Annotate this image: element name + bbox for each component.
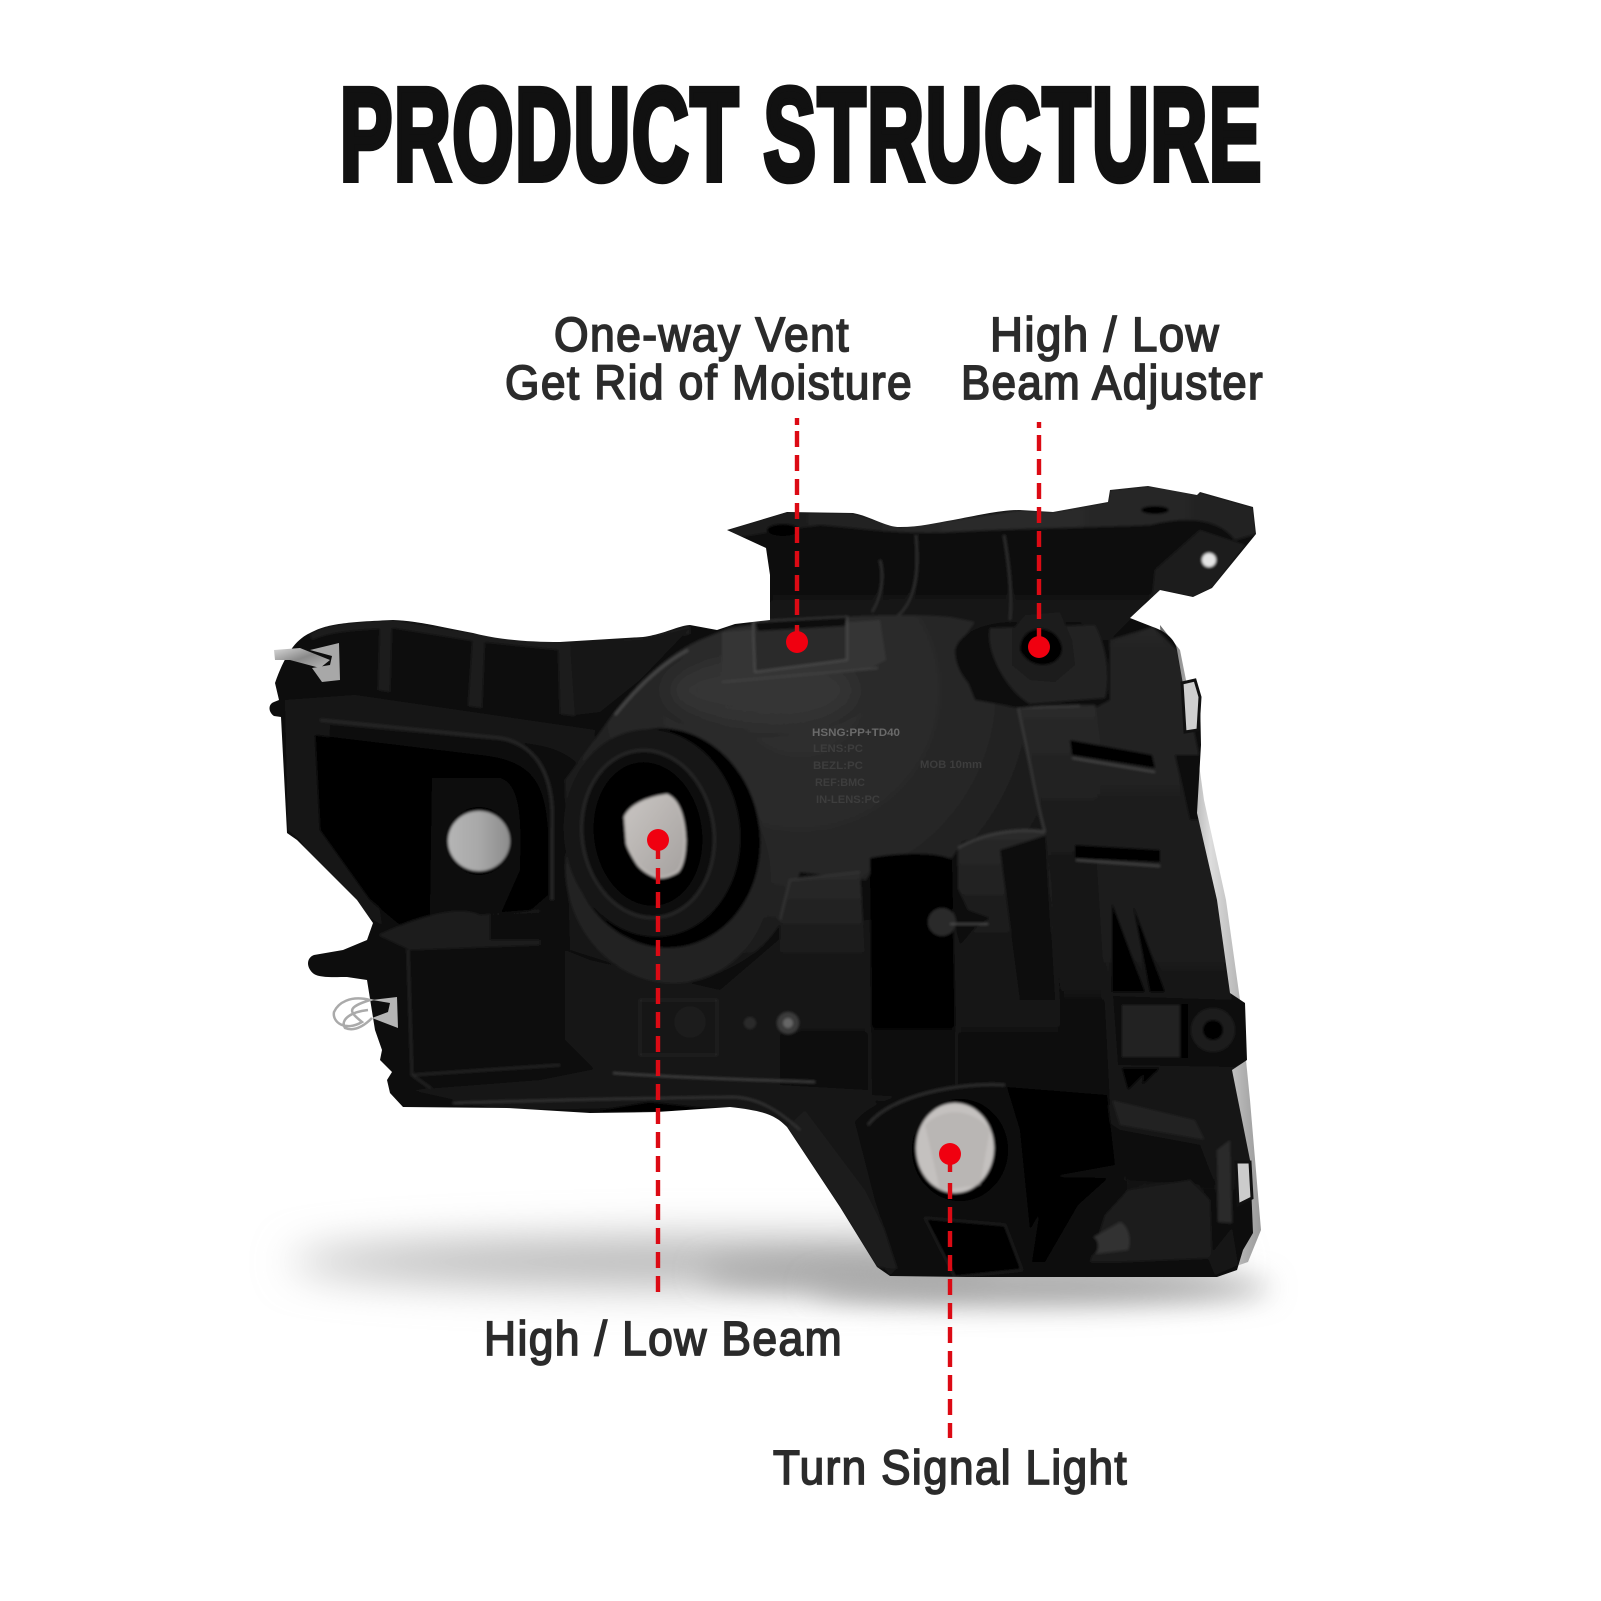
bumps and slot — [780, 831, 1062, 1105]
callout line: adjuster — [1028, 422, 1050, 658]
lower left box — [406, 946, 560, 1104]
left lamp seat — [430, 778, 520, 915]
label: one-way vent — [505, 309, 913, 410]
lower connector details — [453, 1000, 815, 1130]
side mount tab — [1113, 996, 1246, 1067]
label: high low beam: High / Low Beam — [484, 1313, 843, 1366]
embossed material text: REF:BMC — [815, 777, 865, 789]
rubber grommet skirt — [564, 826, 760, 983]
left frame rails — [285, 695, 595, 925]
callout line: turn signal — [939, 1143, 961, 1438]
callout line: high low beam — [647, 829, 669, 1292]
high low beam lamp — [625, 795, 685, 877]
upper metal clip — [274, 643, 340, 682]
embossed material text: HSNG:PP+TD40 — [812, 727, 900, 739]
left wing wall — [318, 622, 716, 698]
lower lamp base — [855, 1084, 1238, 1277]
center peg — [926, 889, 989, 944]
embossed material text: MOB 10mm — [920, 759, 982, 771]
lower metal clip — [334, 997, 398, 1029]
left lamp opening — [445, 807, 513, 875]
label: one-way vent: Get Rid of Moisture — [505, 357, 913, 410]
small drain nipple — [1092, 1222, 1130, 1255]
lower right panel — [1090, 1180, 1212, 1262]
mounting bracket upper wall — [727, 486, 1256, 640]
embossed material text: IN-LENS:PC — [816, 794, 880, 806]
embossed material text: LENS:PC — [813, 743, 863, 755]
side clear clips — [1182, 680, 1252, 1205]
turn signal tab — [925, 1218, 1022, 1277]
adjuster recess — [955, 622, 1105, 708]
mounting hole — [1202, 553, 1216, 567]
high low adjuster knob — [1014, 622, 1066, 666]
high low beam grommet — [564, 729, 741, 938]
upper slot — [1070, 740, 1155, 768]
label: one-way vent: One-way Vent — [554, 309, 850, 362]
turn signal lamp — [912, 1099, 1008, 1201]
ground shadow — [290, 1238, 1270, 1304]
highlight sheen — [689, 672, 740, 710]
headlight housing — [260, 480, 1270, 1290]
dark ridge recess — [1007, 1087, 1115, 1230]
lower triangle panel — [1115, 1130, 1215, 1185]
callout line: one-way vent — [786, 418, 808, 653]
one-way vent — [723, 615, 884, 674]
triangular fins — [1112, 903, 1165, 992]
frame highlight — [320, 720, 552, 900]
embossed material text — [812, 727, 982, 806]
main dome — [565, 615, 1045, 985]
embossed material text: BEZL:PC — [813, 760, 863, 772]
label: adjuster — [961, 309, 1264, 410]
label: adjuster: High / Low — [990, 309, 1220, 362]
left bay recess — [315, 735, 548, 925]
center lower body — [565, 908, 961, 1104]
chrome lens edge — [1160, 625, 1261, 1270]
right panels — [1018, 627, 1260, 1280]
label: turn signal: Turn Signal Light — [773, 1442, 1128, 1495]
black wedge — [1032, 1177, 1108, 1262]
label: adjuster: Beam Adjuster — [961, 357, 1264, 410]
lighter band — [1114, 1102, 1202, 1138]
side bar — [1217, 1140, 1232, 1223]
lower slot — [1075, 845, 1160, 862]
housing base — [260, 480, 1270, 1290]
